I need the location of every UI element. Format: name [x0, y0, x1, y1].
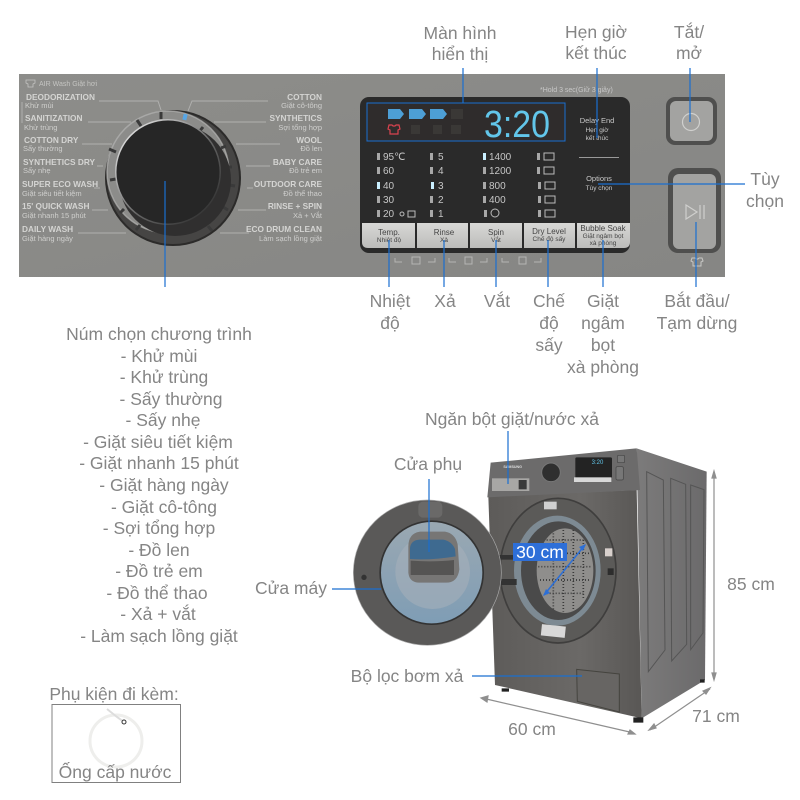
- label: dry level: Chế: [533, 291, 565, 311]
- panel buttons: [362, 223, 630, 248]
- delay and options labels: [579, 116, 619, 192]
- program labels: left column: AIR Wash Giặt hơi: [39, 81, 97, 88]
- control panel photo: *Hold 3 sec(Giữ 3 giây): [540, 87, 613, 94]
- program labels: right column: RINSE + SPIN: [268, 201, 322, 211]
- selector knob: [105, 110, 241, 246]
- dimension: depth: 71 cm: [692, 706, 740, 726]
- digital control panel: [360, 97, 630, 253]
- program labels: right column: COTTON: [287, 92, 322, 102]
- setting columns: 40: [383, 181, 395, 192]
- dimension: width: 60 cm: [508, 719, 556, 739]
- setting columns: 1400: [489, 152, 512, 163]
- program list: - Đồ thể thao: [106, 583, 208, 603]
- setting columns: [377, 152, 555, 220]
- label: display: hiển thị: [432, 44, 488, 64]
- setting columns: 20: [383, 209, 395, 220]
- panel buttons: Spin: [488, 228, 504, 237]
- program labels: left column: Khử trùng: [24, 123, 57, 132]
- program labels: right column: Xả + Vắt: [293, 211, 323, 220]
- machine front: [488, 490, 642, 718]
- program labels: right column: SYNTHETICS: [269, 113, 322, 123]
- panel buttons: Nhiệt độ: [377, 237, 401, 244]
- program labels: left column: Giặt nhanh 15 phút: [22, 211, 87, 220]
- program labels: left column: SANITIZATION: [25, 113, 82, 123]
- setting columns: 95℃: [383, 152, 405, 163]
- setting columns: 60: [383, 166, 395, 177]
- label: bubble soak: bọt: [591, 335, 615, 355]
- small display: 3:20: [592, 460, 604, 466]
- label: options: chọn: [746, 191, 784, 211]
- small display: [574, 457, 612, 482]
- label: options: Tùy: [750, 169, 780, 189]
- program labels: left column: Giặt siêu tiết kiệm: [22, 189, 82, 198]
- label: power: mở: [676, 43, 702, 63]
- program list: - Đồ trẻ em: [115, 561, 203, 581]
- program list: - Giặt siêu tiết kiệm: [83, 432, 233, 452]
- power button: [666, 97, 717, 145]
- panel buttons: Xả: [440, 237, 448, 244]
- program labels: left column: Giặt hàng ngày: [22, 234, 73, 243]
- open door: [353, 500, 517, 645]
- detergent drawer: [492, 465, 529, 491]
- program list: - Khử mùi: [121, 346, 197, 366]
- 30 cm drum arrow: 30 cm: [516, 542, 564, 562]
- delay and options labels: Tùy chọn: [586, 185, 613, 192]
- program labels: left column: [22, 80, 161, 243]
- program list: - Đồ len: [128, 540, 190, 560]
- program list: - Giặt nhanh 15 phút: [79, 453, 239, 473]
- leader lines: [165, 68, 745, 676]
- top panel: [487, 448, 640, 497]
- control panel photo: [19, 74, 725, 277]
- label: bubble soak: ngâm: [581, 313, 625, 333]
- program list: - Giặt hàng ngày: [99, 475, 229, 495]
- setting columns: 2: [438, 195, 444, 206]
- accessory box: water hose: [52, 704, 180, 782]
- program labels: right column: Làm sạch lồng giặt: [259, 234, 323, 243]
- program labels: right column: WOOL: [296, 135, 322, 145]
- start button: [668, 168, 721, 266]
- label: detergent drawer: Ngăn bột giặt/nước xả: [425, 409, 599, 429]
- label: start pause: Bắt đầu/: [664, 290, 730, 311]
- program labels: right column: Đồ trẻ em: [289, 166, 322, 175]
- panel buttons: Chế độ sấy: [533, 234, 566, 243]
- label: start pause: Tạm dừng: [657, 313, 737, 333]
- label: pump filter: Bộ lọc bơm xả: [351, 666, 464, 686]
- program labels: left column: 15' QUICK WASH: [22, 201, 89, 211]
- panel buttons: Bubble Soak: [580, 224, 627, 233]
- feet: [502, 679, 705, 723]
- panel buttons: Rinse: [434, 228, 455, 237]
- program list: - Làm sạch lồng giặt: [80, 626, 238, 646]
- label: temperature: độ: [380, 313, 400, 333]
- accessory box: water hose: Ống cấp nước: [59, 761, 172, 782]
- delay and options labels: Options: [586, 174, 612, 183]
- label: display: Màn hình: [424, 23, 496, 43]
- program labels: right column: BABY CARE: [273, 157, 322, 167]
- label: dry level: sấy: [535, 335, 563, 355]
- program list: Núm chọn chương trình: [66, 324, 252, 344]
- program list: - Xả + vắt: [120, 603, 196, 624]
- label: main door: Cửa máy: [255, 578, 327, 598]
- program labels: right column: Đồ thể thao: [283, 189, 322, 198]
- panel buttons: Vắt: [491, 235, 501, 244]
- program labels: left column: COTTON DRY: [24, 135, 79, 145]
- program labels: right column: [188, 92, 323, 243]
- setting columns: 400: [489, 195, 506, 206]
- program labels: left column: DEODORIZATION: [26, 92, 95, 102]
- program labels: right column: OUTDOOR CARE: [254, 179, 322, 189]
- small dial: [542, 463, 560, 482]
- program labels: left column: SUPER ECO WASH: [22, 179, 98, 189]
- program labels: left column: Khử mùi: [25, 101, 54, 110]
- label: power: Tắt/: [674, 21, 704, 42]
- detergent drawer: SAMSUNG: [503, 465, 522, 469]
- program list: - Khử trùng: [120, 367, 208, 387]
- program list: - Sấy nhẹ: [126, 410, 200, 430]
- program labels: right column: Đồ len: [300, 144, 322, 153]
- label: rinse: Xả: [434, 291, 456, 311]
- program labels: left column: Sấy thường: [23, 144, 63, 153]
- delay and options labels: kết thúc: [586, 133, 609, 142]
- label: temperature: Nhiệt: [370, 291, 411, 311]
- 30 cm drum arrow: [513, 542, 586, 596]
- program list: - Sấy thường: [120, 389, 222, 409]
- setting columns: 5: [438, 152, 444, 163]
- setting columns: 800: [489, 181, 506, 192]
- delay and options labels: Hẹn giờ: [585, 127, 609, 134]
- label: delay end: kết thúc: [565, 43, 627, 63]
- delay and options labels: Delay End: [580, 116, 614, 125]
- setting columns: 30: [383, 195, 395, 206]
- program list: - Sợi tổng hợp: [103, 518, 215, 538]
- dimension: height: 85 cm: [727, 574, 775, 594]
- label: bubble soak: xà phòng: [567, 357, 639, 377]
- panel buttons: Giặt ngâm bọt: [583, 233, 624, 240]
- panel buttons: xà phòng: [590, 240, 617, 247]
- clock digits: 3:20: [484, 104, 550, 146]
- setting columns: 1: [438, 209, 444, 220]
- program labels: left column: SYNTHETICS DRY: [23, 157, 96, 167]
- machine side: [637, 448, 707, 718]
- washing machine: [353, 448, 707, 723]
- program labels: left column: DAILY WASH: [22, 224, 73, 234]
- program labels: right column: ECO DRUM CLEAN: [246, 224, 322, 234]
- program list: - Giặt cô-tông: [111, 497, 217, 517]
- door frame and drum: [500, 498, 616, 643]
- setting columns: 3: [438, 181, 444, 192]
- filter cover: [577, 669, 619, 712]
- setting columns: 1200: [489, 166, 512, 177]
- label: small door: Cửa phụ: [394, 454, 462, 474]
- label: delay end: Hẹn giờ: [565, 22, 627, 42]
- program labels: right column: Sợi tổng hợp: [278, 123, 322, 132]
- dimension arrows: [481, 471, 716, 734]
- panel buttons: Temp.: [378, 228, 400, 237]
- label: dry level: độ: [539, 313, 559, 333]
- accessories heading: Phụ kiện đi kèm:: [49, 684, 179, 704]
- program labels: left column: Sấy nhẹ: [23, 166, 51, 175]
- label: bubble soak: Giặt: [587, 291, 619, 311]
- setting columns: 4: [438, 166, 444, 177]
- label: spin: Vắt: [484, 290, 510, 311]
- display screen: [367, 103, 565, 146]
- panel buttons: Dry Level: [532, 227, 566, 236]
- program labels: right column: Giặt cô-tông: [281, 101, 322, 110]
